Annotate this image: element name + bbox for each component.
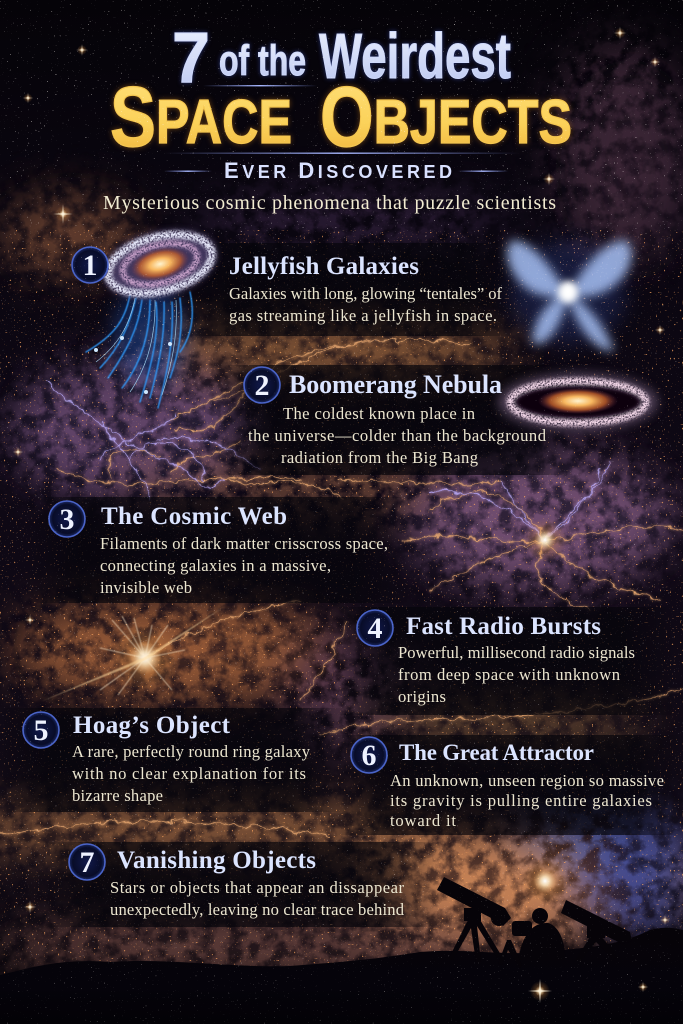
panel 1: Jellyfish Galaxies — [72, 219, 632, 408]
description: An unknown, unseen region so massive — [390, 771, 664, 790]
number badge 7: 7 — [80, 846, 94, 879]
number badge 5: 5 — [34, 714, 48, 747]
number badge 2 — [244, 367, 280, 403]
illustration: jellyfish galaxy — [86, 219, 224, 408]
telescope right — [561, 900, 632, 962]
illustration: butterfly nebula — [507, 240, 632, 351]
description: The coldest known place in — [283, 404, 476, 423]
heading: Fast Radio Bursts — [406, 613, 601, 640]
panel background — [25, 497, 410, 603]
number badge 5 — [23, 712, 59, 748]
description: toward it — [390, 811, 456, 830]
panel 2: Boomerang Nebula — [215, 365, 658, 475]
description: from deep space with unknown — [398, 665, 621, 684]
astronomer — [498, 908, 565, 968]
panel background — [335, 735, 683, 835]
panel 6: The Great Attractor — [335, 735, 683, 835]
panel 5: Hoag’s Object — [0, 708, 345, 812]
heading: Vanishing Objects — [117, 847, 316, 874]
heading: The Cosmic Web — [101, 503, 287, 530]
title block — [103, 19, 572, 214]
description: bizarre shape — [72, 786, 163, 805]
panel background — [45, 842, 440, 927]
title line 3: Ever Discovered: EVER DISCOVERED — [224, 158, 452, 183]
title line 1: 7 of the Weirdest — [172, 19, 511, 98]
title line 2: Space Objects: BJECTS — [374, 88, 572, 157]
heading: Hoag’s Object — [73, 712, 231, 739]
title line 2: Space Objects: PACE — [156, 88, 320, 157]
subtitle: Mysterious cosmic phenomena that puzzle scientists — [103, 192, 556, 214]
number badge 2: 2 — [254, 369, 270, 402]
panel background — [335, 607, 675, 715]
number badge 7 — [69, 844, 105, 880]
panel background — [215, 365, 575, 475]
description: unexpectedly, leaving no clear trace behind — [110, 900, 405, 919]
number badge 1 — [72, 247, 108, 283]
description: A rare, perfectly round ring galaxy — [72, 742, 311, 761]
description: the universe—colder than the background — [248, 426, 547, 445]
description: Filaments of dark matter crisscross space, — [100, 534, 388, 553]
ground — [0, 928, 683, 1024]
number badge 6 — [351, 737, 387, 773]
heading: Jellyfish Galaxies — [229, 253, 419, 280]
illustration: ring galaxy — [498, 373, 658, 431]
number badge 1: 1 — [82, 249, 98, 282]
panel background — [180, 243, 515, 336]
panel 3: The Cosmic Web — [25, 497, 410, 603]
title line 2: Space Objects: S — [110, 70, 156, 165]
title line 1: 7 of the Weirdest: of the — [219, 37, 306, 85]
number badge 6: 6 — [362, 739, 376, 772]
panel 4: Fast Radio Bursts — [335, 607, 675, 715]
description: radiation from the Big Bang — [281, 448, 478, 467]
description: Powerful, millisecond radio signals — [398, 643, 635, 662]
panel background — [0, 708, 345, 812]
bright web node — [523, 518, 567, 562]
number badge 3 — [49, 501, 85, 537]
title line 1: 7 of the Weirdest: Weirdest — [319, 20, 511, 92]
description: with no clear explanation for its — [72, 764, 306, 783]
bright star burst — [40, 606, 225, 702]
description: its gravity is pulling entire galaxies — [390, 791, 652, 810]
description: Stars or objects that appear an dissappear — [110, 878, 404, 897]
description: gas streaming like a jellyfish in space. — [229, 306, 497, 325]
heading: Boomerang Nebula — [289, 370, 502, 399]
description: Galaxies with long, glowing “tentales” of — [229, 284, 502, 303]
title line 2: Space Objects: O — [320, 70, 374, 165]
description: connecting galaxies in a massive, — [100, 556, 331, 575]
telescope left — [437, 877, 511, 962]
number badge 4 — [357, 610, 393, 646]
heading: The Great Attractor — [399, 740, 594, 765]
panel 7: Vanishing Objects — [45, 842, 440, 927]
number badge 3: 3 — [60, 503, 74, 536]
title line 1: 7 of the Weirdest: 7 — [172, 19, 210, 98]
bright star above telescopes — [521, 857, 569, 905]
description: invisible web — [100, 578, 192, 597]
cosmic web filaments — [0, 340, 683, 835]
description: origins — [398, 687, 446, 706]
number badge 4: 4 — [368, 612, 382, 645]
silhouette: ground and telescopes — [0, 877, 683, 1024]
